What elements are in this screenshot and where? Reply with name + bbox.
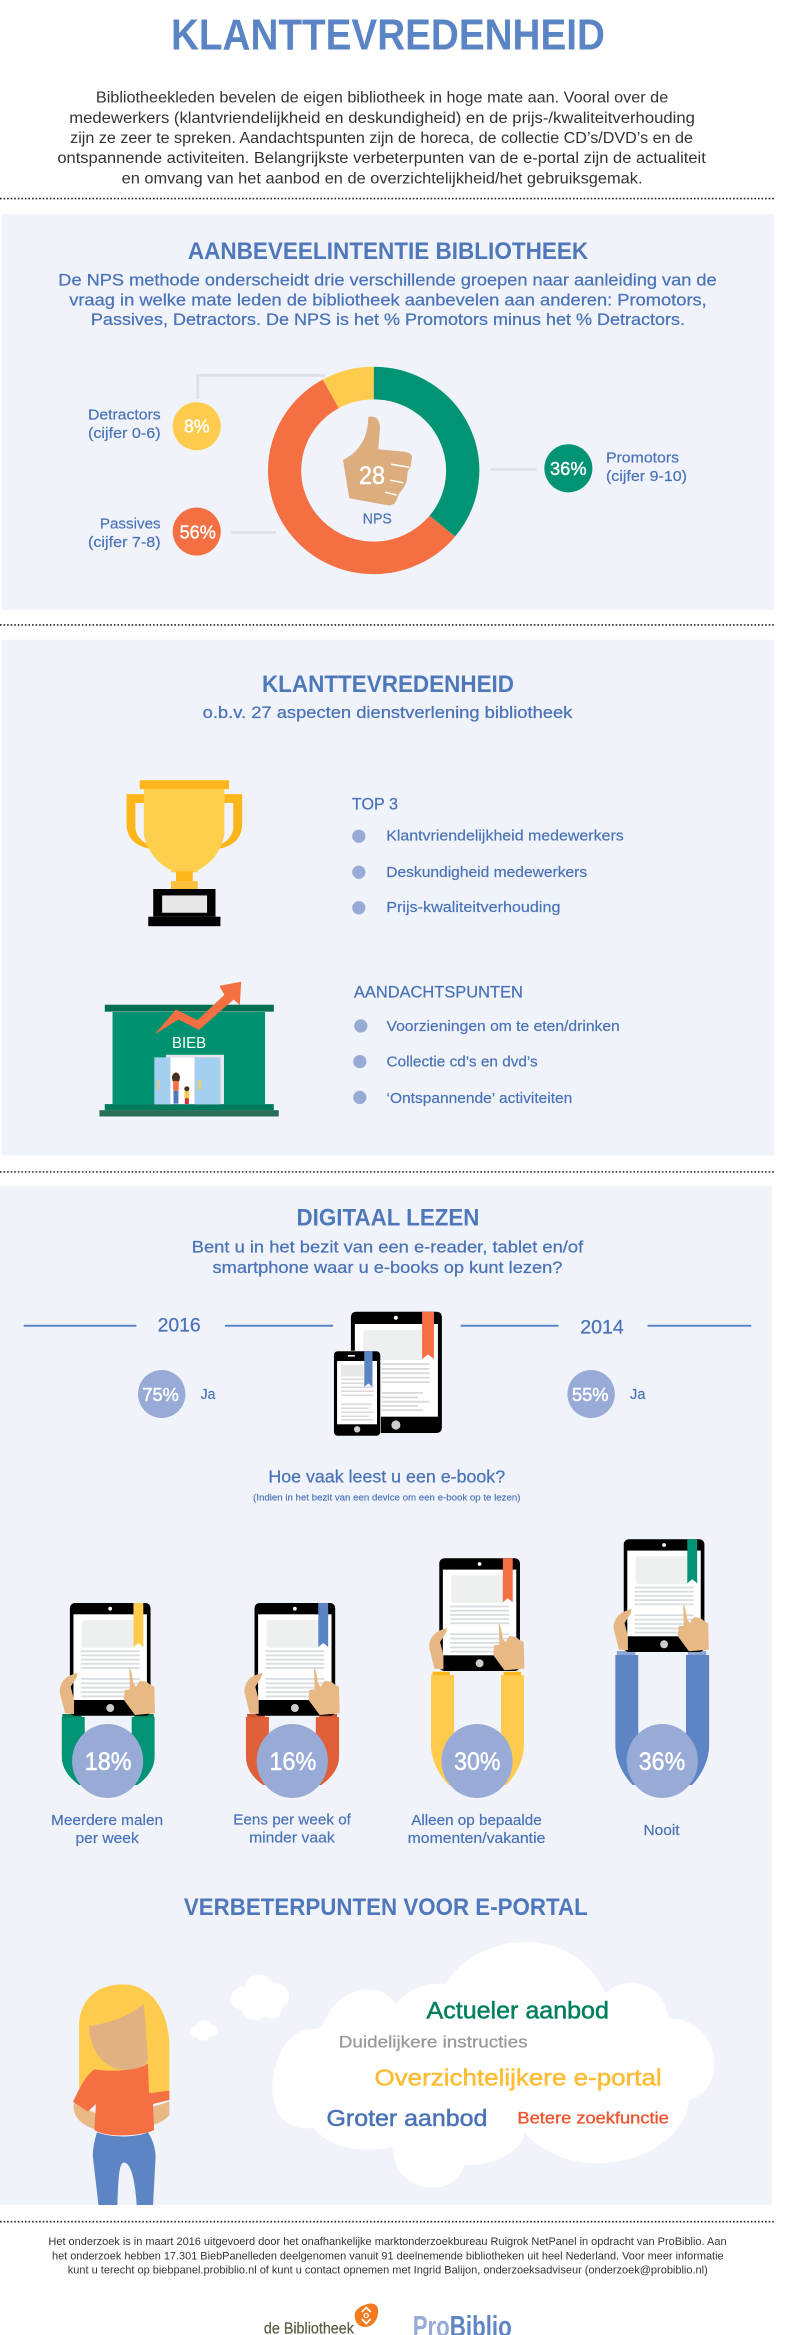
label: alleen op bepaalde momenten: Alleen op bepaalde <box>411 1813 542 1829</box>
thought cloud <box>190 1942 714 2188</box>
top 3 list: Prijs-kwaliteitverhouding <box>386 900 560 916</box>
aandachtspunten list: Collectie cd’s en dvd’s <box>387 1055 538 1071</box>
note: indien in bezit: (Indien in het bezit van een device om een e-book op te lezen) <box>253 1493 520 1504</box>
label: alleen op bepaalde momenten <box>408 1813 545 1847</box>
figure: alleen op bepaalde momenten 30% <box>429 1558 524 1798</box>
passives badge <box>173 508 221 556</box>
label: eens per week: minder vaak <box>249 1831 335 1847</box>
passives label: (cijfer 7-8) <box>88 535 161 551</box>
promotors badge: 36% <box>550 458 587 479</box>
intro text <box>57 90 707 187</box>
detractors label: Detractors <box>88 408 161 424</box>
logo: ProBiblio <box>413 2310 512 2335</box>
footer text: het onderzoek hebben 17.301 BiebPanelleden deelgenomen vanuit 91 deelnemende bibliotheken uit heel Nederland. Voor meer informatie <box>52 2250 724 2262</box>
NPS explanation text: Passives, Detractors. De NPS is het % Promotors minus het % Detractors. <box>91 310 685 329</box>
cloud text: overzichtelijkere e-portal: Overzichtelijkere e-portal <box>374 2065 662 2091</box>
badge 2016: 75%: 75% <box>142 1384 179 1405</box>
figure: eens per week 16%: 16% <box>269 1749 316 1776</box>
intro text: medewerkers (klantvriendelijkheid en deskundigheid) en de prijs-/kwaliteitverhouding <box>69 110 695 127</box>
panel: klanttevredenheid <box>1 640 774 1156</box>
cloud text: groter aanbod: Groter aanbod <box>327 2105 487 2131</box>
figure: nooit 36% <box>614 1539 709 1798</box>
intro text: Bibliotheekleden bevelen de eigen bibliotheek in hoge mate aan. Vooral over de <box>96 90 668 107</box>
detractors badge: 8% <box>184 416 210 437</box>
top 3 list: Klantvriendelijkheid medewerkers <box>386 829 624 845</box>
question: bezit e-reader: smartphone waar u e-books op kunt lezen? <box>213 1258 562 1277</box>
cloud text: duidelijkere instructies: Duidelijkere instructies <box>339 2033 528 2052</box>
label: meerdere malen <box>51 1813 163 1847</box>
cloud text: betere zoekfunctie: Betere zoekfunctie <box>517 2108 669 2127</box>
promotors label: (cijfer 9-10) <box>606 469 687 485</box>
question: hoe vaak: Hoe vaak leest u een e-book? <box>268 1467 505 1487</box>
title: KLANTTEVREDENHEID <box>171 11 605 59</box>
connector: passives <box>231 531 276 534</box>
label: Ja 2016: Ja <box>201 1387 216 1403</box>
figure: eens per week 16% <box>244 1603 340 1798</box>
label: Ja 2014: Ja <box>630 1387 646 1403</box>
year 2014: 2014 <box>580 1318 624 1339</box>
question: bezit e-reader: Bent u in het bezit van een e-reader, tablet en/of <box>192 1238 584 1257</box>
donut chart <box>285 383 463 558</box>
heading: digitaal lezen: DIGITAAL LEZEN <box>297 1205 479 1232</box>
label: meerdere malen: per week <box>76 1831 139 1847</box>
top 3 list <box>352 829 624 916</box>
NPS value: 28 <box>359 463 385 490</box>
icon: thumbs up <box>343 416 412 506</box>
panel: digitaal lezen en e-portal <box>0 1186 772 2205</box>
top 3 heading: TOP 3 <box>352 794 398 813</box>
figure: meerdere malen 18% <box>60 1603 155 1798</box>
label: eens per week <box>233 1812 352 1847</box>
aandachtspunten list: ‘Ontspannende’ activiteiten <box>387 1091 572 1107</box>
badge 2014: 55%: 55% <box>572 1384 609 1405</box>
icon: tablet and phone <box>334 1312 442 1436</box>
intro text: zijn ze zeer te spreken. Aandachtspunten zijn de horeca, de collectie CD’s/DVD’s en de <box>70 130 693 147</box>
footer text: kunt u terecht op biebpanel.probiblio.nl of kunt u contact opnemen met Ingrid Balijon, onderzoeksadviseur (onderzoek@probiblio.nl) <box>68 2264 708 2276</box>
detractors label <box>88 408 161 442</box>
NPS label: NPS <box>363 512 392 528</box>
aandachtspunten list: Voorzieningen om te eten/drinken <box>387 1019 620 1035</box>
question: bezit e-reader <box>192 1238 584 1277</box>
promotors label: Promotors <box>606 450 679 466</box>
heading: verbeterpunten: VERBETERPUNTEN VOOR E-PORTAL <box>184 1894 588 1921</box>
icon: library building: BIEB <box>172 1035 206 1052</box>
footer text <box>48 2236 727 2276</box>
intro text: en omvang van het aanbod en de overzichtelijkheid/het gebruiksgemak. <box>122 170 643 187</box>
figure: girl <box>73 1984 169 2205</box>
heading: aanbeveelintentie: AANBEVEELINTENTIE BIBLIOTHEEK <box>188 239 588 265</box>
detractors label: (cijfer 0-6) <box>88 426 161 442</box>
year 2016: 2016 <box>158 1316 201 1337</box>
heading: klanttevredenheid: KLANTTEVREDENHEID <box>262 672 514 698</box>
connector: detractors <box>198 375 325 399</box>
figure: alleen op bepaalde momenten 30%: 30% <box>454 1749 500 1776</box>
icon: library building <box>99 982 279 1116</box>
promotors label <box>606 450 687 485</box>
top 3 list: Deskundigheid medewerkers <box>386 865 587 881</box>
passives label <box>88 516 161 551</box>
intro text: ontspannende activiteiten. Belangrijkste verbeterpunten van de e-portal zijn de actualiteit <box>57 150 707 167</box>
detractors badge <box>173 402 221 450</box>
figure: nooit 36%: 36% <box>639 1749 685 1776</box>
promotors badge <box>544 444 592 492</box>
label: alleen op bepaalde momenten: momenten/vakantie <box>408 1831 545 1847</box>
aandachtspunten heading: AANDACHTSPUNTEN <box>354 982 523 1001</box>
connector: promotors <box>491 468 537 471</box>
NPS explanation text: De NPS methode onderscheidt drie verschillende groepen naar aanleiding van de <box>58 271 717 290</box>
badge 2016: 75% <box>138 1370 185 1418</box>
footer text: Het onderzoek is in maart 2016 uitgevoerd door het onafhankelijke marktonderzoekbureau Ruigrok NetPanel in opdracht van ProBiblio. Aan <box>48 2236 727 2248</box>
label: nooit: Nooit <box>644 1823 680 1839</box>
badge 2014: 55% <box>567 1370 615 1418</box>
passives label: Passives <box>100 516 161 532</box>
cloud text: actueler aanbod: Actueler aanbod <box>427 1997 609 2024</box>
subheading: aspecten: o.b.v. 27 aspecten dienstverlening bibliotheek <box>203 704 573 722</box>
icon: trophy <box>127 780 242 926</box>
label: eens per week: Eens per week of <box>233 1812 352 1828</box>
NPS explanation text <box>58 271 717 329</box>
passives badge: 56% <box>180 521 216 542</box>
figure: meerdere malen 18%: 18% <box>85 1749 131 1776</box>
NPS explanation text: vraag in welke mate leden de bibliotheek aanbevelen aan anderen: Promotors, <box>69 290 707 309</box>
logo: de Bibliotheek <box>264 2303 378 2335</box>
panel: aanbeveelintentie <box>1 214 774 610</box>
aandachtspunten list <box>353 1019 620 1107</box>
label: meerdere malen: Meerdere malen <box>51 1813 163 1829</box>
